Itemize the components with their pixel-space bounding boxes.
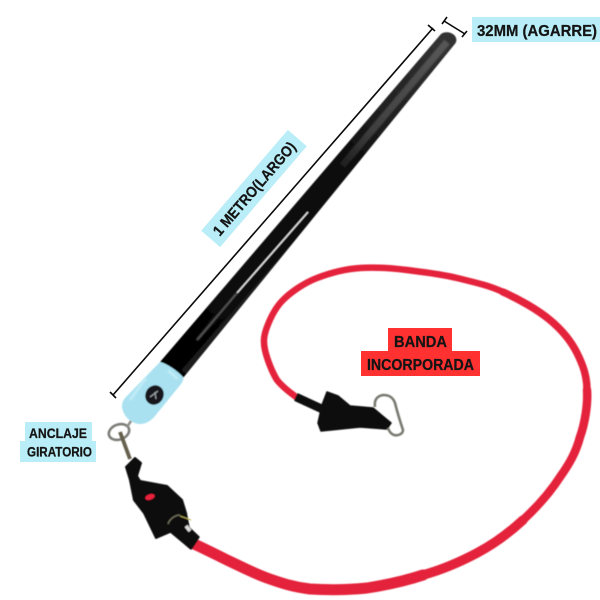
label: 32mm grip: 32MM (AGARRE) xyxy=(477,23,597,40)
lower black handle xyxy=(126,458,199,549)
cap hole xyxy=(142,382,167,408)
sleeve highlight xyxy=(186,526,190,531)
upper sleeve xyxy=(296,397,322,409)
lower sleeve xyxy=(167,516,199,549)
label: swivel anchor xyxy=(20,422,96,462)
swivel anchor hook xyxy=(107,421,131,459)
label: built-in band xyxy=(361,328,480,376)
cap hole screw xyxy=(150,391,158,399)
label: swivel anchor: ANCLAJE xyxy=(29,426,87,441)
swivel stem xyxy=(120,432,130,459)
yellow thread xyxy=(180,516,191,520)
label: built-in band: BANDA xyxy=(394,334,447,351)
width measure line xyxy=(442,17,467,37)
metal triangle ring xyxy=(375,395,403,435)
rod shading xyxy=(184,42,447,372)
rod upper sheen xyxy=(342,42,447,166)
rod faint highlight xyxy=(197,293,237,340)
sleeve ring xyxy=(168,515,180,524)
red resistance band xyxy=(192,268,587,590)
black rod body xyxy=(160,32,456,378)
metal ring xyxy=(107,421,131,443)
upper black handle xyxy=(296,392,403,435)
cap sheen xyxy=(130,371,177,400)
label: swivel anchor: GIRATORIO xyxy=(27,444,92,460)
rod highlight xyxy=(237,212,308,293)
rod xyxy=(122,32,456,424)
label: built-in band: INCORPORADA xyxy=(367,357,474,374)
red dot xyxy=(144,493,156,501)
label: 32mm grip xyxy=(472,17,600,42)
label: 1 metre length: 1 METRO(LARGO) xyxy=(210,139,300,239)
length measure line xyxy=(110,25,435,398)
rod end cap xyxy=(122,362,183,424)
cap link xyxy=(127,421,131,427)
rod lower right tone xyxy=(184,222,314,372)
